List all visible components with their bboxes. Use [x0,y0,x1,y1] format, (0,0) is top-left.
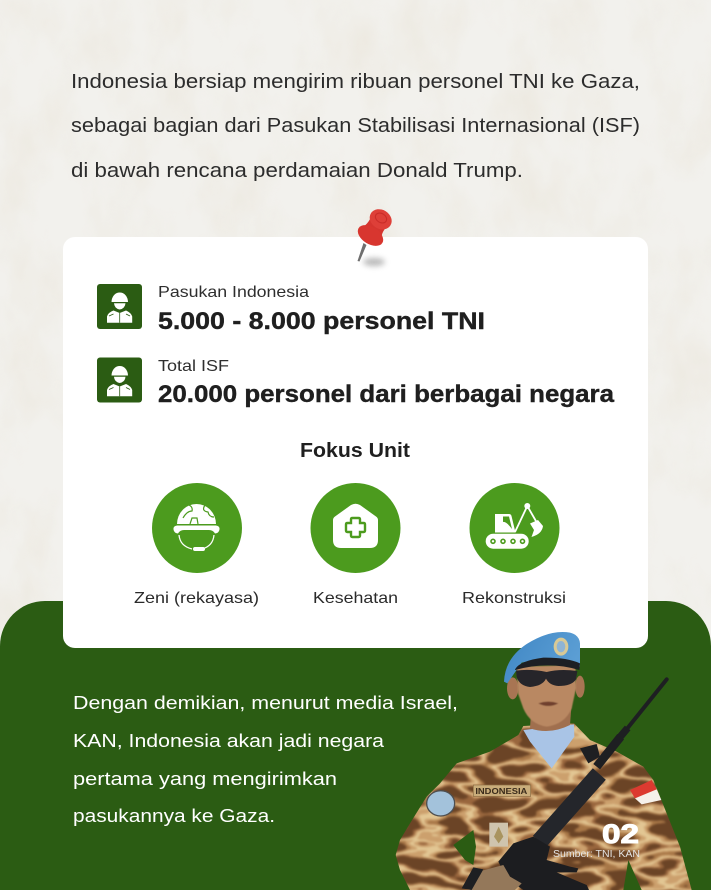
beret [504,632,580,683]
INDONESIA name tape: INDONESIA [475,786,527,796]
intro text block: di bawah rencana perdamaian Donald Trump. [71,159,523,182]
text: Pasukan Indonesia: Pasukan Indonesia [158,284,309,301]
text: Total ISF: 20.000 personel dari berbagai negara [158,381,615,408]
heading: Fokus Unit: Fokus Unit [300,440,410,462]
panel: green bottom section [0,601,711,890]
closing text block: KAN, Indonesia akan jadi negara [73,730,385,751]
gloved hand [462,865,522,890]
label: Kesehatan: Kesehatan [313,590,398,607]
uniform with camouflage [390,720,711,890]
text: Total ISF: Total ISF [158,358,229,375]
sunglasses [516,670,577,687]
icon: Rekonstruksi excavator [470,483,560,573]
rifle [498,679,667,890]
text: Total ISF [158,358,615,408]
panel: white card [63,205,648,648]
Indonesian flag patch [630,780,661,804]
label: Rekonstruksi: Rekonstruksi [462,590,566,607]
face [517,665,576,727]
icon: Zeni helmet [152,483,242,573]
closing text block [73,692,458,826]
text: Pasukan Indonesia [158,284,485,335]
icon: soldier (Pasukan Indonesia) [97,284,142,329]
page number: 02 [602,819,639,849]
closing text block: Dengan demikian, menurut media Israel, [73,692,458,713]
soldier illustration [390,632,711,890]
text: Pasukan Indonesia: 5.000 - 8.000 personel TNI [158,308,485,335]
closing text block: pasukannya ke Gaza. [73,805,275,826]
light blue collar [523,724,574,768]
chest badge [489,823,508,847]
source note: Sumber: TNI, KAN [553,848,640,860]
icon: Kesehatan house with cross [310,483,400,573]
intro text block: Indonesia bersiap mengirim ribuan personel TNI ke Gaza, [71,70,640,93]
UN shoulder patch [427,791,455,816]
icon: soldier (Total ISF) [97,358,142,402]
intro text block: sebagai bagian dari Pasukan Stabilisasi Internasional (ISF) [71,114,640,137]
icon: red push pin [354,205,395,266]
label: Zeni (rekayasa): Zeni (rekayasa) [134,590,259,607]
neck [530,703,572,731]
closing text block: pertama yang mengirimkan [73,768,337,789]
ears [507,676,585,699]
intro text block [71,70,640,182]
